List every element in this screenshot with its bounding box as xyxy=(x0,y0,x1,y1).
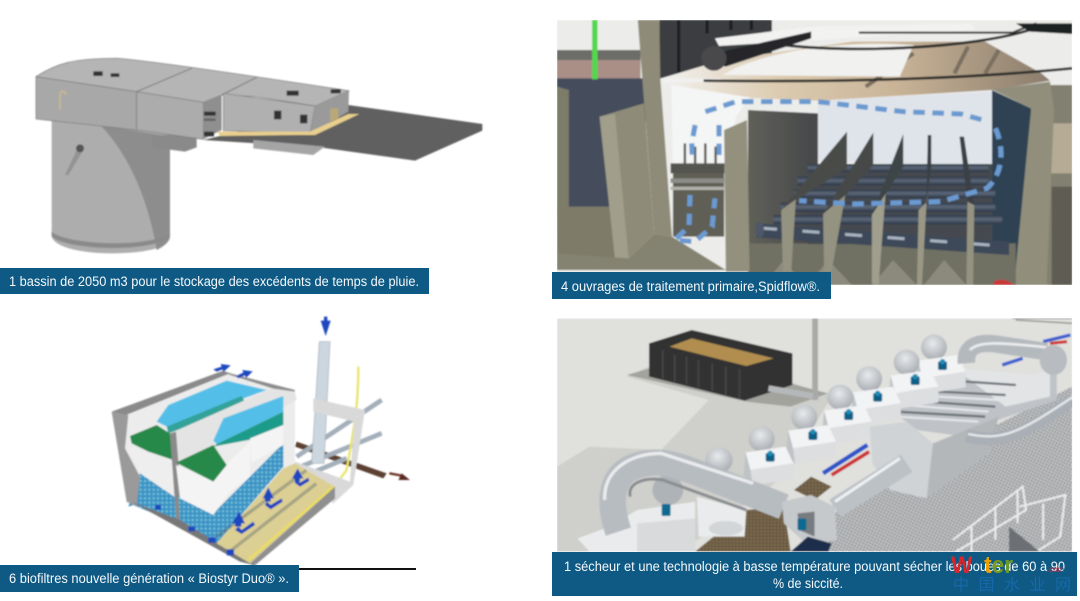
watermark xyxy=(951,552,1071,594)
chamber with foam xyxy=(672,86,750,163)
stair railing xyxy=(953,487,1065,552)
right duct xyxy=(966,400,1072,439)
white wall 2 xyxy=(176,442,250,515)
yellow walkway xyxy=(217,114,359,136)
flow arrows xyxy=(675,102,1001,242)
green media top 1 xyxy=(130,425,173,460)
left grey end wall xyxy=(112,412,140,507)
watermark: Water xyxy=(951,552,1013,579)
beads xyxy=(128,473,177,523)
front walls xyxy=(36,77,137,130)
dryer modules xyxy=(916,335,966,394)
building shadow xyxy=(557,367,828,552)
floor xyxy=(750,243,1016,285)
left basin xyxy=(557,50,641,63)
panel: low temperature dryer illustration xyxy=(557,318,1072,552)
pipe bank background xyxy=(808,164,992,244)
blue arrows xyxy=(155,317,331,555)
watermark: 中 国 水 业 网 xyxy=(953,576,1071,594)
pipes xyxy=(756,164,1009,255)
gate frame xyxy=(293,398,365,503)
white wall 1 xyxy=(128,447,175,498)
panel: storage basin illustration xyxy=(36,58,482,253)
sludge bin xyxy=(649,330,792,401)
caption: dryer: % de siccité. xyxy=(773,576,843,591)
caption: dryer: 1 sécheur et une technologie à basse température pouvant sécher les boues de 60 à 90 xyxy=(564,559,1065,574)
vertical pipe xyxy=(312,342,330,463)
sludge surface xyxy=(661,42,1050,101)
caption: dryer xyxy=(552,552,1077,596)
dark right chamber xyxy=(992,90,1031,280)
caption: primary treatment: 4 ouvrages de traitement primaire,Spidflow®. xyxy=(561,279,820,294)
water front xyxy=(213,396,283,444)
yellow cable xyxy=(337,367,358,483)
main bent duct xyxy=(613,462,784,532)
watermark: .com xyxy=(1047,565,1065,574)
red and blue pipes xyxy=(823,445,867,473)
back wall xyxy=(112,371,295,523)
cylinder tank xyxy=(52,120,170,253)
back wall xyxy=(818,92,992,170)
beads 2 xyxy=(178,443,283,543)
heat exchanger xyxy=(870,422,933,498)
underside blocks xyxy=(152,135,197,152)
front left module xyxy=(652,475,683,505)
green media top 2 xyxy=(176,445,227,482)
caption: biofilters xyxy=(0,565,299,592)
openings xyxy=(93,71,341,136)
right background xyxy=(1047,85,1072,285)
concrete slab xyxy=(203,105,482,161)
fin stack xyxy=(900,374,1058,436)
caption: primary treatment xyxy=(552,272,831,299)
junction box xyxy=(782,495,837,545)
caption: biofilters: 6 biofiltres nouvelle génération « Biostyr Duo® ». xyxy=(9,571,289,586)
caption: storage basin xyxy=(0,268,429,294)
caption: storage basin: 1 bassin de 2050 m3 pour le stockage des excédents de temps de pluie. xyxy=(9,274,419,289)
baffle plates xyxy=(781,132,974,285)
roller and mechanism xyxy=(714,30,774,48)
front duct xyxy=(835,463,907,508)
panel: primary treatment Spidflow illustration xyxy=(557,20,1072,285)
mesh grate xyxy=(828,387,1072,552)
water back xyxy=(157,381,267,427)
upper duct xyxy=(966,343,1047,363)
pipes behind xyxy=(295,442,387,478)
roof xyxy=(36,58,349,106)
floor xyxy=(217,463,335,563)
partition xyxy=(170,388,297,465)
concrete walls xyxy=(638,20,672,237)
pole xyxy=(812,318,818,400)
panel: Biostyr Duo biofilter illustration xyxy=(112,317,410,567)
dark back structure xyxy=(659,20,772,78)
